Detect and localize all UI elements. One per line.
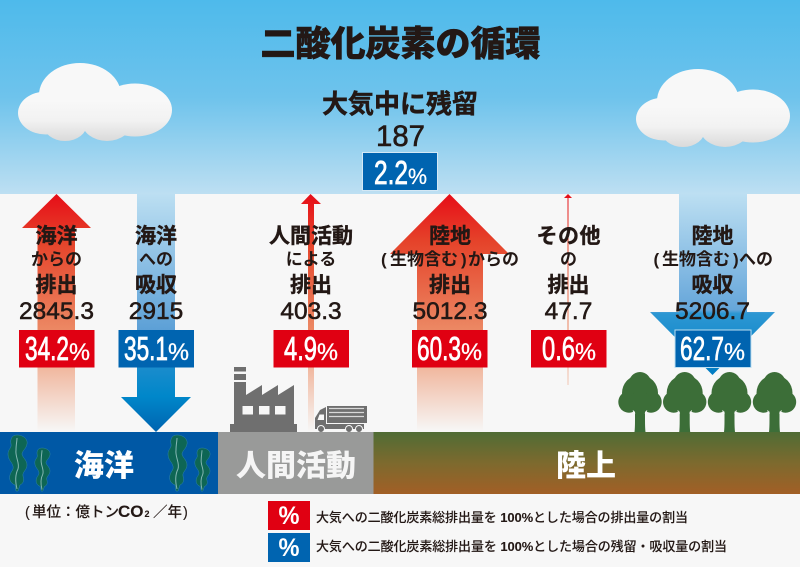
icon: right cloud — [636, 69, 790, 147]
label: ocean emission — [19, 225, 94, 325]
icon: seaweed right pair — [168, 435, 210, 491]
label: other emission: 排出 — [548, 274, 590, 297]
atmosphere value: 187 — [376, 120, 425, 153]
label: human activity emission: 排出 — [290, 274, 332, 297]
unit note: ( — [25, 505, 30, 521]
arrow: other emission — [564, 194, 572, 385]
label: ocean emission: 海洋 — [36, 225, 78, 248]
legend: red — [268, 501, 688, 530]
unit note: ) — [183, 505, 188, 521]
badge: land emission 60.3%: % — [461, 339, 482, 366]
band label: land: 陸上 — [556, 450, 616, 483]
label: land emission: ) — [461, 250, 467, 269]
unit note: CO — [118, 502, 144, 521]
label: human activity emission: 人間活動 — [269, 225, 353, 248]
badge: human activity 4.9%: % — [317, 339, 338, 366]
label: ocean emission: 2845.3 — [19, 298, 94, 325]
icon: left cloud — [18, 63, 172, 141]
atmosphere percent badge — [362, 152, 438, 191]
badge: land absorption 62.7%: 62.7 — [680, 330, 724, 367]
label: other emission: 47.7 — [545, 298, 592, 325]
band: ocean — [0, 432, 218, 494]
label: other emission — [536, 225, 600, 325]
badge: ocean emission 34.2%: 34.2 — [25, 330, 69, 367]
unit note: 単位：億トン — [32, 503, 119, 521]
label: land emission: 5012.3 — [413, 298, 487, 325]
arrow: human activity emission — [301, 194, 321, 432]
label: other emission: の — [560, 250, 577, 269]
icon: factory — [230, 367, 297, 432]
label: land absorption: ) — [733, 250, 739, 269]
label: ocean absorption: 吸収 — [135, 274, 177, 297]
band label: human activity: 人間活動 — [236, 450, 356, 483]
legend: blue: % — [278, 534, 300, 562]
label: land emission: 排出 — [429, 274, 471, 297]
band: land — [374, 432, 800, 494]
atmosphere heading: 大気中に残留 — [322, 89, 478, 119]
label: land absorption — [654, 225, 773, 325]
arrow: ocean absorption — [121, 194, 191, 432]
label: ocean absorption — [129, 225, 183, 325]
badge: human activity 4.9%: 4.9 — [284, 330, 317, 367]
atmosphere percent badge: % — [408, 164, 427, 189]
label: land absorption: ( — [654, 250, 660, 269]
label: land emission: 生物含む — [390, 250, 458, 269]
label: ocean emission: 排出 — [36, 274, 78, 297]
label: land emission: からの — [468, 250, 519, 269]
arrow: land absorption — [650, 194, 775, 375]
legend: blue — [268, 533, 727, 562]
label: other emission: その他 — [536, 225, 600, 248]
badge: ocean emission 34.2%: % — [69, 339, 90, 366]
badge: ocean absorption 35.1%: % — [168, 339, 189, 366]
icon: truck — [315, 406, 367, 432]
label: land absorption: 吸収 — [692, 274, 734, 297]
label: human activity emission: 403.3 — [280, 298, 342, 325]
label: land absorption: 生物含む — [662, 250, 730, 269]
label: land absorption: 陸地 — [692, 225, 734, 248]
legend: red: % — [278, 502, 300, 530]
atmosphere percent badge: 2.2 — [374, 154, 408, 191]
badge: other 0.6% — [531, 330, 606, 368]
atmosphere residual block — [322, 89, 478, 191]
label: ocean absorption: 2915 — [129, 298, 183, 325]
unit note: ／年 — [153, 504, 182, 521]
ground background — [0, 194, 800, 567]
badge: ocean absorption 35.1%: 35.1 — [124, 330, 168, 367]
arrow: ocean emission — [22, 194, 91, 432]
badge: other 0.6%: % — [575, 339, 596, 366]
badge: land emission 60.3%: 60.3 — [417, 330, 461, 367]
label: land absorption: への — [739, 250, 773, 269]
label: ocean emission: からの — [31, 250, 82, 269]
label: land emission — [381, 225, 519, 325]
badge: other 0.6%: 0.6 — [542, 330, 575, 367]
icon: seaweed left pair — [8, 435, 50, 491]
label: land emission: 陸地 — [429, 225, 471, 248]
unit note: 2 — [144, 509, 150, 519]
legend: red: 大気への二酸化炭素総排出量を 100%とした場合の排出量の割当 — [316, 510, 688, 525]
band label: ocean: 海洋 — [74, 450, 134, 483]
label: ocean absorption: への — [139, 250, 173, 269]
badge: human activity 4.9% — [274, 330, 349, 368]
icon: tree row — [618, 372, 796, 432]
badge: land absorption 62.7%: % — [724, 339, 745, 366]
label: human activity emission — [269, 225, 353, 325]
legend: blue: 大気への二酸化炭素総排出量を 100%とした場合の残留・吸収量の割当 — [316, 539, 727, 554]
title: 二酸化炭素の循環 — [260, 25, 541, 64]
label: land absorption: 5206.7 — [675, 298, 750, 325]
arrow: land emission — [390, 194, 509, 432]
band: human activity — [218, 432, 374, 494]
sky background — [0, 0, 800, 194]
label: ocean absorption: 海洋 — [135, 225, 177, 248]
label: land emission: ( — [381, 250, 387, 269]
label: human activity emission: による — [286, 250, 336, 269]
